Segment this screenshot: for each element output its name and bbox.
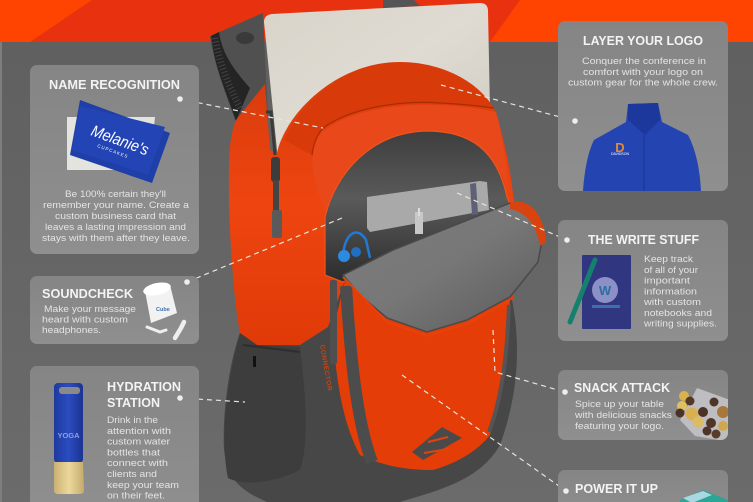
body text (568, 56, 718, 88)
vertical zipper strip (346, 286, 372, 462)
dot: power it up (563, 488, 569, 494)
body text: connect with (107, 458, 168, 469)
dot: soundcheck (184, 279, 190, 285)
heading: SNACK ATTACK (574, 380, 671, 395)
panel: name recognition (30, 65, 199, 254)
dashed connector: snack attack (493, 330, 565, 392)
heading: SOUNDCHECK (42, 286, 134, 301)
icon: business cards (67, 100, 170, 183)
dot: hydration station (177, 395, 183, 401)
body text: custom business card that (55, 211, 176, 222)
icon: notebook and pen: W (599, 283, 612, 298)
icon: blue jacket: DAVIDSON (611, 152, 629, 156)
dot: name recognition (177, 96, 183, 102)
heading: STATION (107, 395, 160, 410)
heading: THE WRITE STUFF (588, 232, 699, 247)
laptop (264, 3, 490, 160)
top handle (383, 0, 420, 8)
dot: the write stuff (564, 237, 570, 243)
right trim strip (489, 305, 509, 432)
body text: headphones. (42, 325, 101, 336)
body text (643, 254, 717, 330)
body text: with delicious snacks (574, 410, 672, 421)
heading: POWER IT UP (575, 481, 658, 496)
body text (42, 189, 190, 244)
body text: Keep track (644, 254, 693, 265)
icon: water bottle (54, 383, 84, 494)
icon: business cards: Melanie's (89, 123, 151, 159)
brand text on side: CONNECTOR (318, 344, 333, 392)
mesh side pocket (224, 333, 306, 483)
icon: water bottle: YOGA (57, 431, 80, 440)
body text: keep your team (107, 480, 179, 491)
body text (42, 304, 136, 336)
body text: with custom (643, 297, 701, 308)
body text: information (644, 286, 697, 298)
body text: on their feet. (107, 490, 165, 502)
icon: business cards: CUPCAKES (97, 143, 129, 159)
icon: power bank (680, 490, 728, 502)
diamond logo patch (412, 427, 462, 460)
body text (574, 399, 672, 432)
orange top band (0, 0, 753, 42)
body text: important (644, 276, 690, 286)
body text: bottles that (107, 448, 160, 458)
heading: LAYER YOUR LOGO (583, 33, 703, 48)
icon: snack tray (676, 388, 730, 442)
flap ridge highlight (312, 105, 510, 212)
dashed connector: soundcheck (187, 218, 342, 282)
dashed connector: hydration station (180, 398, 245, 402)
dashed connector: the write stuff (457, 193, 567, 240)
front zipper pull (330, 280, 337, 364)
dashed connector: power it up (402, 375, 566, 491)
panel: soundcheck (30, 276, 199, 344)
body text (107, 415, 179, 502)
icon: blue jacket (583, 103, 701, 191)
icon: notebook and pen (570, 255, 631, 329)
body text: remember your name. Create a (43, 200, 190, 211)
heading (107, 379, 181, 410)
dark lower base (224, 280, 517, 502)
body text: Conquer the conference in (582, 56, 706, 67)
panel: hydration station (30, 366, 199, 502)
body text: attention with (107, 426, 171, 437)
dot: snack attack (562, 389, 568, 395)
panel: power it up (558, 470, 728, 502)
dashed connector: name recognition (180, 99, 323, 128)
body text: comfort with your logo on (583, 67, 703, 78)
body text: custom water (107, 436, 171, 448)
dot: layer your logo (572, 118, 578, 124)
body text: leaves a lasting impression and (45, 222, 186, 233)
backpack illustration (210, 0, 546, 502)
body text: Spice up your table (575, 399, 664, 410)
dashed connector: layer your logo (441, 85, 575, 121)
blue earbuds in pocket (338, 233, 370, 262)
heading: NAME RECOGNITION (49, 77, 180, 92)
body text: writing supplies. (643, 318, 717, 330)
side zipper (266, 112, 282, 238)
body text: Make your message (44, 304, 136, 315)
grey notebook in pocket (367, 181, 489, 234)
open pocket interior (325, 131, 512, 282)
body text: stays with them after they leave. (42, 233, 190, 244)
shoulder strap (210, 13, 268, 122)
body text: Drink in the (107, 415, 158, 426)
icon: blue jacket: D (615, 140, 625, 155)
panel: snack attack (558, 370, 730, 442)
body text: of all of your (644, 265, 699, 276)
top flap fold shading (284, 63, 494, 155)
open pocket flap (343, 202, 546, 336)
body text: notebooks and (644, 308, 712, 319)
icon: wireless earbuds and case: Cube (156, 307, 170, 313)
left edge strip (0, 42, 2, 502)
panel: layer your logo (558, 21, 728, 191)
lower orange pocket (333, 280, 510, 470)
body text: heard with custom (42, 314, 128, 326)
body text: featuring your logo. (575, 421, 664, 432)
panel: the write stuff (558, 220, 728, 341)
body text: Be 100% certain they'll (65, 189, 166, 200)
icon: wireless earbuds and case (142, 280, 184, 338)
heading: HYDRATION (107, 379, 181, 394)
body text: custom gear for the whole crew. (568, 78, 718, 88)
body text: clients and (107, 469, 157, 480)
orange backpack body (229, 62, 514, 345)
